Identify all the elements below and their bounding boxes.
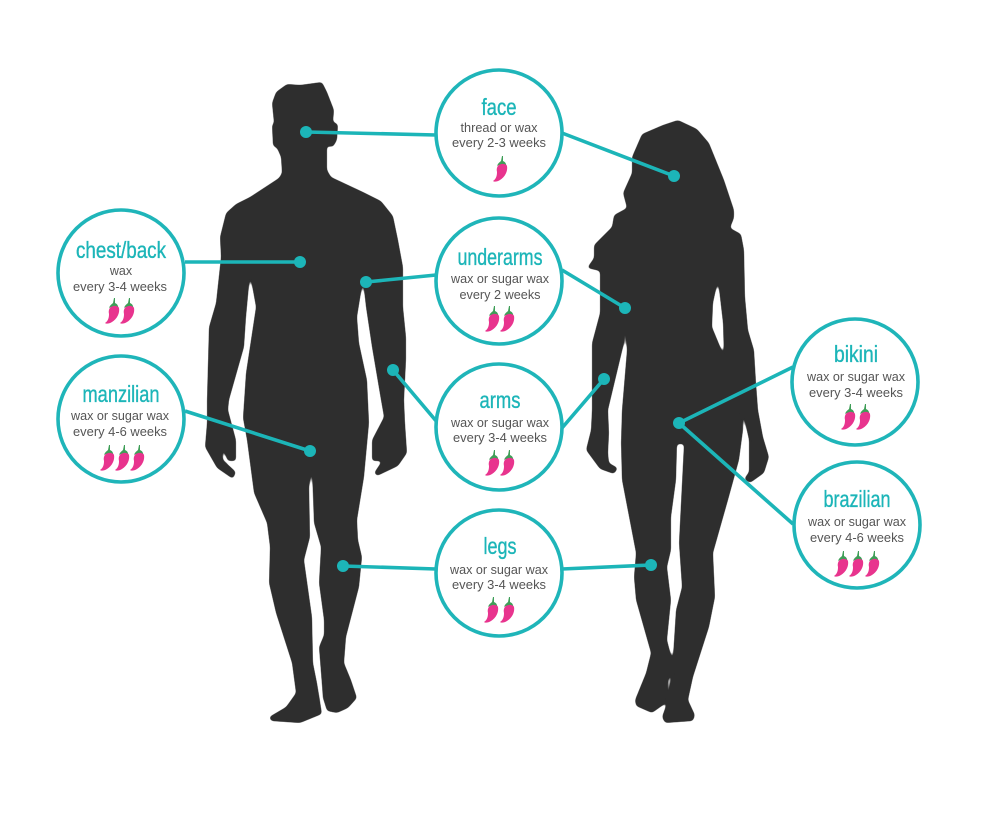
callout: legs: every 3-4 weeks [452,578,546,592]
callout: chest/back [58,210,184,336]
callout: chest/back: every 3-4 weeks [73,280,167,294]
callout: brazilian: every 4-6 weeks [810,531,904,545]
callout: face: face [482,94,516,120]
callout: arms [436,364,562,490]
callout: legs: legs [484,533,516,559]
callout: arms: wax or sugar wax [450,416,550,430]
callout: brazilian: wax or sugar wax [807,515,907,529]
callout: underarms: every 2 weeks [460,288,540,302]
callout: legs: wax or sugar wax [449,563,549,577]
callout: bikini: bikini [834,341,878,367]
callout: brazilian [794,462,920,588]
callout: manzilian: every 4-6 weeks [73,425,167,439]
callout: bikini [792,319,918,445]
callout: underarms [436,218,562,344]
callout: face: every 2-3 weeks [452,136,546,150]
male silhouette [205,82,407,723]
callout: arms: every 3-4 weeks [453,431,547,445]
callout: face: thread or wax [460,121,538,135]
female silhouette [586,120,769,723]
callout: legs [436,510,562,636]
callout: manzilian: wax or sugar wax [70,409,170,423]
callout: face [436,70,562,196]
callout: underarms: underarms [458,244,542,270]
callout: chest/back: chest/back [76,237,166,263]
callout: underarms: wax or sugar wax [450,272,550,286]
callout: bikini: every 3-4 weeks [809,386,903,400]
callout: chest/back: wax [109,264,133,278]
callout: bikini: wax or sugar wax [806,370,906,384]
callout: arms: arms [480,387,520,413]
connector lines and dots [185,126,793,572]
callout: manzilian [58,356,184,482]
callout: manzilian: manzilian [82,381,160,407]
callout: brazilian: brazilian [824,486,890,512]
